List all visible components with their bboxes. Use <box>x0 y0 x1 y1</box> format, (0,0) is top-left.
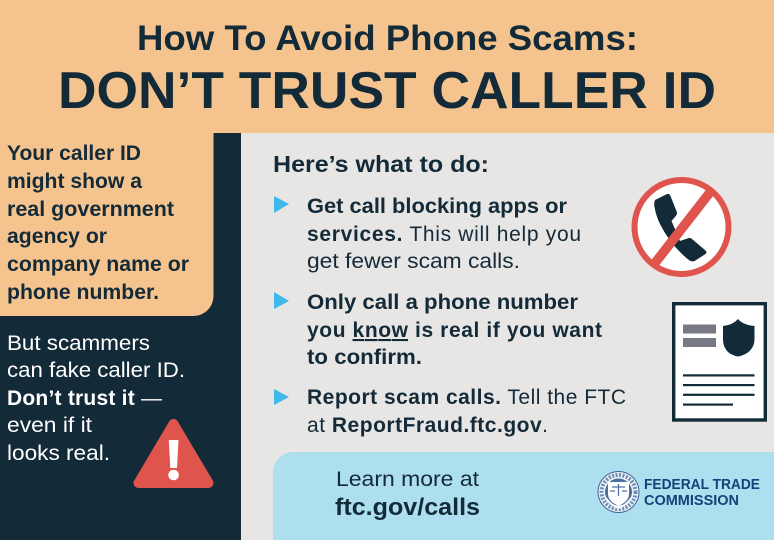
item one text: Get call blocking apps or <box>307 195 567 218</box>
panel: learn more: ftc.gov/calls <box>335 494 480 521</box>
item three text: at ReportFraud.ftc.gov. <box>307 414 548 437</box>
item one text <box>307 195 581 273</box>
item three text: Report scam calls. Tell the FTC <box>307 386 626 409</box>
heading: here's what to do: Here’s what to do: <box>273 151 489 177</box>
panel: left column <box>0 133 241 540</box>
callout: caller ID warning: Your caller ID <box>7 142 141 165</box>
item two text <box>307 291 602 369</box>
item one text: services. This will help you <box>307 223 581 246</box>
callout: caller ID warning: phone number. <box>7 281 159 304</box>
panel: learn more: Learn more at <box>336 468 479 491</box>
list item: report calls <box>274 386 626 437</box>
shield <box>723 319 754 356</box>
callout: caller ID warning: might show a <box>7 170 142 193</box>
logo: agency name <box>644 477 760 509</box>
title: line two: DON’T TRUST CALLER ID <box>58 62 716 120</box>
icon: arrow bullet <box>274 196 289 213</box>
text block: scammers fake caller ID: even if it <box>7 414 92 437</box>
item one text: get fewer scam calls. <box>307 250 520 273</box>
callout: caller ID warning <box>0 133 214 316</box>
icon: document with shield <box>674 304 765 420</box>
item two text: Only call a phone number <box>307 291 578 314</box>
logo: agency name: FEDERAL TRADE <box>644 477 760 493</box>
item two text: to confirm. <box>307 346 422 369</box>
text block: scammers fake caller ID <box>7 332 185 465</box>
panel: learn more <box>273 452 774 540</box>
phone handset <box>654 194 706 261</box>
list item: call known number <box>274 291 602 369</box>
text block: scammers fake caller ID: But scammers <box>7 332 150 355</box>
logo: FTC seal <box>598 472 639 512</box>
item three text <box>307 386 626 437</box>
text block: scammers fake caller ID: can fake caller ID. <box>7 359 185 382</box>
callout: caller ID warning: agency or <box>7 225 107 248</box>
callout: caller ID warning: real government <box>7 198 174 221</box>
icon: warning triangle <box>138 424 208 483</box>
icon: arrow bullet <box>274 389 289 405</box>
prohibition slash <box>655 191 711 263</box>
header band <box>0 0 774 133</box>
item two text: you know is real if you want <box>307 319 602 342</box>
icon: crossed-out phone <box>634 180 728 274</box>
text block: scammers fake caller ID: Don’t trust it — <box>7 387 162 410</box>
text block: scammers fake caller ID: looks real. <box>7 442 110 465</box>
icon: arrow bullet <box>274 292 289 309</box>
callout: caller ID warning: company name or <box>7 253 189 276</box>
title: line one: How To Avoid Phone Scams: <box>137 19 638 58</box>
list item: call blocking <box>274 195 581 273</box>
logo: agency name: COMMISSION <box>644 493 739 509</box>
